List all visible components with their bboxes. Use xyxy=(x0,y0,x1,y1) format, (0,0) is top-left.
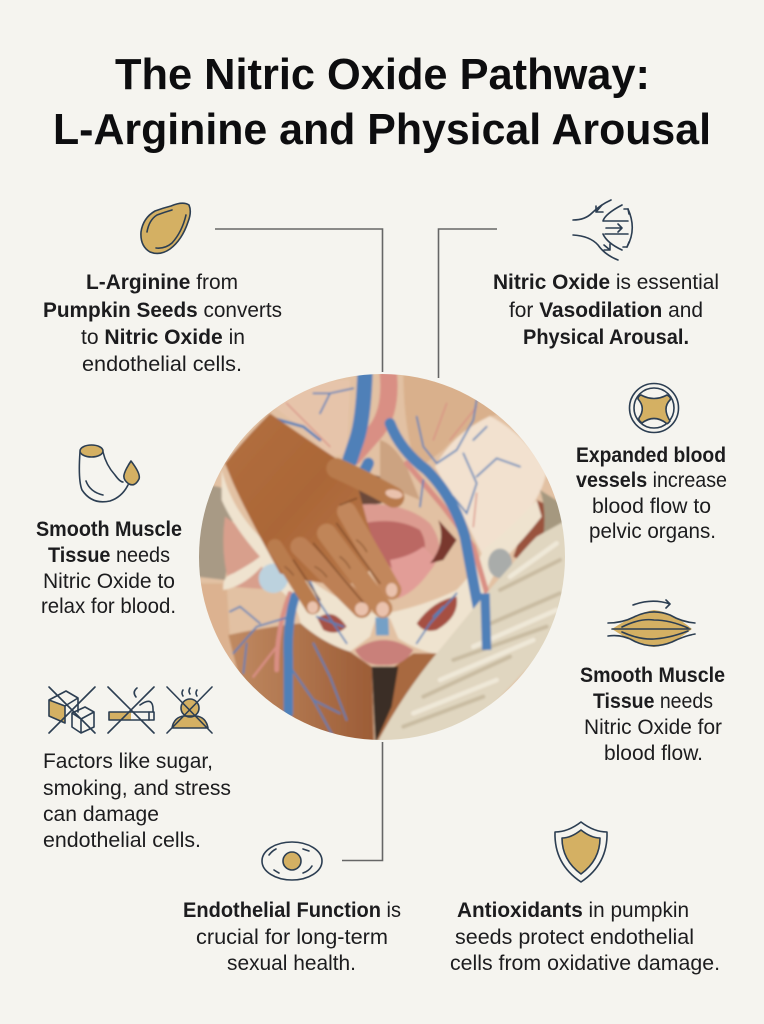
text: risk factors: can damage xyxy=(43,803,159,826)
text: endothelial function xyxy=(183,899,401,975)
text: endothelial function: sexual health. xyxy=(227,952,356,975)
text: L-Arginine: endothelial cells. xyxy=(82,353,242,376)
title: The Nitric Oxide Pathway: xyxy=(115,50,650,99)
pink muscle fan xyxy=(355,640,413,665)
text: smooth muscle left xyxy=(36,518,182,618)
title: L-Arginine and Physical Arousal xyxy=(53,105,711,154)
text: L-Arginine: to Nitric Oxide in xyxy=(81,326,245,349)
red ovals xyxy=(317,614,347,633)
icon: crossed cigarette xyxy=(108,687,154,733)
icon: smooth muscle tube and drop xyxy=(79,445,139,502)
text: smooth muscle left: Tissue needs xyxy=(48,544,170,567)
text: Nitric Oxide essential xyxy=(493,271,719,349)
text: risk factors: Factors like sugar, xyxy=(43,750,213,773)
text: antioxidants: cells from oxidative damage. xyxy=(450,952,720,975)
draped cloth xyxy=(377,520,567,743)
text: smooth muscle left: Smooth Muscle xyxy=(36,518,182,541)
text: risk factors xyxy=(43,750,231,852)
title xyxy=(53,50,711,154)
vein over cloth xyxy=(485,593,487,650)
icon: shield xyxy=(555,822,607,882)
text: smooth muscle left: Nitric Oxide to xyxy=(43,570,175,593)
text: antioxidants xyxy=(450,899,720,975)
text: expanded blood vessels: Expanded blood xyxy=(576,444,726,467)
icon: vasodilation arrows xyxy=(573,200,632,260)
text: smooth muscle right xyxy=(580,664,725,765)
text: smooth muscle right: Smooth Muscle xyxy=(580,664,725,687)
hand xyxy=(225,413,380,587)
text: antioxidants: seeds protect endothelial xyxy=(455,926,694,949)
text: smooth muscle right: Nitric Oxide for xyxy=(584,716,722,739)
upper right pelvis xyxy=(435,416,547,557)
central circular anatomical illustration xyxy=(199,374,565,740)
text: risk factors: endothelial cells. xyxy=(43,829,201,852)
icon: crossed sugar cubes xyxy=(49,687,95,733)
gray-blue joints xyxy=(259,564,288,593)
abdomen center xyxy=(380,440,420,500)
upper tan shading xyxy=(403,376,496,462)
text: Nitric Oxide essential: Physical Arousal. xyxy=(523,326,689,349)
text: endothelial function: Endothelial Function is xyxy=(183,899,401,922)
icon: expanded blood vessel ring xyxy=(630,384,678,432)
pelvic cream band left xyxy=(222,470,542,654)
text: smooth muscle right: Tissue needs xyxy=(593,690,713,713)
text: L-Arginine: Pumpkin Seeds converts xyxy=(43,299,282,322)
text: expanded blood vessels: blood flow to xyxy=(592,495,711,518)
text: L-Arginine: L-Arginine from xyxy=(86,271,238,294)
text: endothelial function: crucial for long-term xyxy=(196,926,388,949)
icon: pumpkin seed xyxy=(141,203,190,253)
icon: endothelial cell xyxy=(262,842,322,880)
arteries xyxy=(253,373,497,677)
text: Nitric Oxide essential: for Vasodilation and xyxy=(509,299,703,322)
text: expanded blood vessels: vessels increase xyxy=(576,469,727,492)
text: smooth muscle left: relax for blood. xyxy=(41,595,176,618)
icon: muscle spindle xyxy=(608,600,695,647)
text: antioxidants: Antioxidants in pumpkin xyxy=(457,899,689,922)
text: expanded blood vessels: pelvic organs. xyxy=(589,520,716,543)
lower brown thigh areas xyxy=(228,623,374,743)
text: Nitric Oxide essential: Nitric Oxide is essential xyxy=(493,271,719,294)
text: expanded blood vessels xyxy=(576,444,727,543)
text: risk factors: smoking, and stress xyxy=(43,777,231,800)
text: L-Arginine xyxy=(43,271,282,376)
text: smooth muscle right: blood flow. xyxy=(604,742,703,765)
central organ xyxy=(362,502,440,570)
icon: crossed stressed person xyxy=(167,687,212,733)
veins xyxy=(230,373,520,737)
connector lines to central illustration xyxy=(215,229,497,860)
